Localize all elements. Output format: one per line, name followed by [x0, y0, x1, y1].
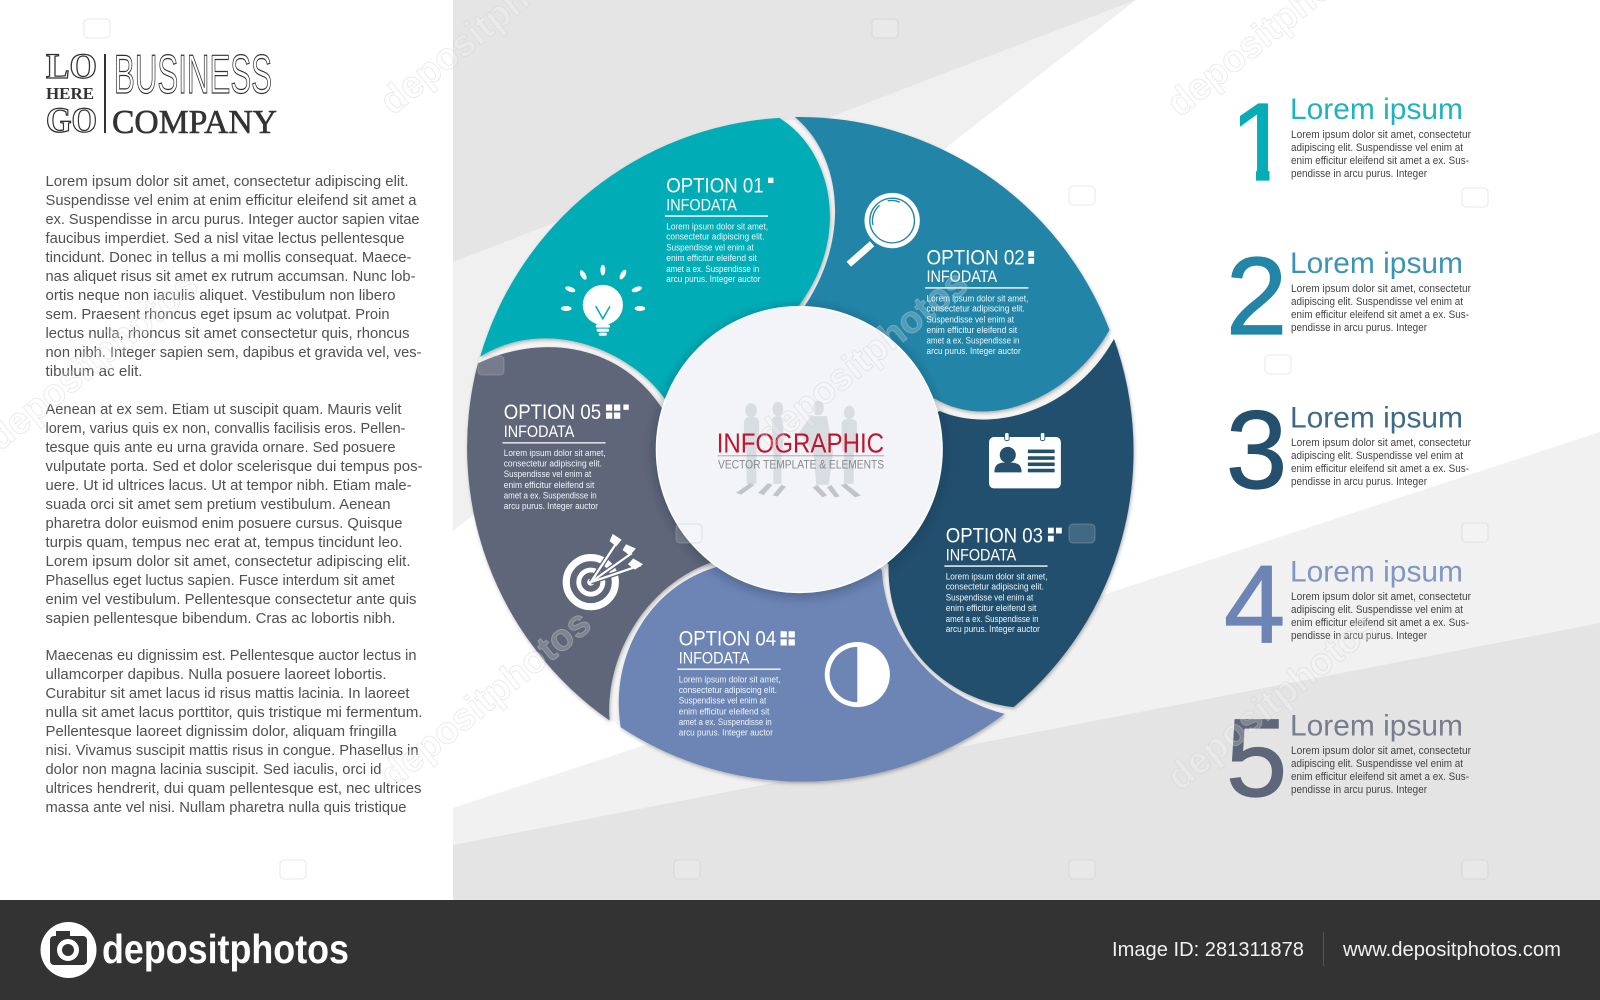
- body text: paragraph 3: ultrices hendrerit, dui quam pellentesque est, nec ultrices: [46, 780, 422, 797]
- body text: paragraph 1: tibulum ac elit.: [46, 363, 142, 380]
- option 04 text: amet a ex. Suspendisse in: [679, 717, 772, 727]
- option 03 text: Suspendisse vel enim at: [946, 592, 1034, 602]
- body text: paragraph 2: suada orci sit amet sem pretium vestibulum. Aenean: [46, 496, 390, 513]
- footer logo: [40, 922, 349, 978]
- body text: paragraph 2: enim vel vestibulum. Pellentesque consectetur ante quis: [46, 591, 416, 608]
- legend item 1: 1: [1230, 81, 1291, 204]
- body text: paragraph 2: lorem, varius quis ex non, convallis facilisis eros. Pellen-: [46, 420, 406, 437]
- legend item 2: Lorem ipsum dolor sit amet, consectetur: [1291, 283, 1471, 295]
- option 05 text: enim efficitur eleifend sit: [504, 480, 595, 490]
- legend item 5: Lorem ipsum: [1290, 710, 1463, 742]
- option 02 text: enim efficitur eleifend sit: [927, 325, 1018, 335]
- logo: business company: BUSINESS: [114, 43, 272, 105]
- legend item 2: Lorem ipsum: [1290, 247, 1463, 280]
- footer url: www.depositphotos.com: [1342, 939, 1561, 961]
- option 01 text: Lorem ipsum dolor sit amet,: [666, 221, 768, 231]
- legend item 4: enim efficitur eleifend sit amet a ex. Sus-: [1291, 617, 1469, 629]
- icon: target with arrows: [566, 534, 643, 607]
- option 04 text: [677, 627, 795, 737]
- body text: paragraph 2: sapien pellentesque bibendum. Cras ac lobortis nibh.: [46, 610, 396, 627]
- option 05 text: OPTION 05: [504, 400, 601, 424]
- segment 4: periwinkle: [619, 450, 1005, 782]
- body text: paragraph 1: nas aliquet risus sit amet ex rutrum accumsan. Nunc lob-: [46, 268, 416, 285]
- option 01 text: [665, 173, 773, 284]
- body text: paragraph 2: [46, 401, 423, 627]
- option 01 text: INFODATA: [666, 196, 737, 214]
- option 03 text: consectetur adipiscing elit.: [946, 582, 1044, 592]
- segment 3: navy: [799, 339, 1134, 707]
- silhouettes of people: [736, 401, 861, 497]
- body text: paragraph 2: uere. Ut id ultrices lacus. Ut at tempor nibh. Etiam male-: [46, 477, 412, 494]
- body text: paragraph 3: Maecenas eu dignissim est. Pellentesque auctor lectus in: [46, 647, 416, 664]
- option 02 text: [925, 245, 1034, 356]
- option 05 text: consectetur adipiscing elit.: [504, 459, 602, 469]
- option 03 text: enim efficitur eleifend sit: [946, 603, 1037, 613]
- legend item 5: adipiscing elit. Suspendisse vel enim at: [1291, 758, 1463, 770]
- body text: paragraph 1: Lorem ipsum dolor sit amet, consectetur adipiscing elit.: [46, 173, 408, 190]
- option 03 text: [944, 523, 1062, 634]
- legend item 2: enim efficitur eleifend sit amet a ex. Sus-: [1291, 309, 1469, 321]
- option 01 text: amet a ex. Suspendisse in: [666, 264, 759, 274]
- legend item 5: pendisse in arcu purus. Integer: [1291, 784, 1427, 796]
- option 05 text: arcu purus. Integer auctor: [504, 501, 598, 511]
- legend item 5: [1226, 697, 1471, 820]
- option 01 text: OPTION 01: [666, 173, 764, 197]
- legend item 4: adipiscing elit. Suspendisse vel enim at: [1291, 604, 1463, 616]
- option 05 text: Lorem ipsum dolor sit amet,: [504, 448, 606, 458]
- body text: paragraph 2: Lorem ipsum dolor sit amet, consectetur adipiscing elit.: [46, 553, 410, 570]
- legend item 3: enim efficitur eleifend sit amet a ex. Sus-: [1291, 463, 1469, 475]
- option 02 text: Lorem ipsum dolor sit amet,: [927, 293, 1028, 303]
- legend item 5: Lorem ipsum dolor sit amet, consectetur: [1291, 745, 1471, 757]
- body text: paragraph 3: massa ante vel nisi. Nullam pharetra nulla quis tristique: [46, 799, 406, 816]
- option 02 text: arcu purus. Integer auctor: [927, 346, 1021, 356]
- legend item 5: 5: [1226, 697, 1287, 820]
- legend item 1: [1240, 98, 1471, 181]
- option 02 text: INFODATA: [927, 268, 997, 286]
- center title: [717, 428, 884, 472]
- body text: paragraph 1: faucibus imperdiet. Sed a nisl vitae lectus pellentesque: [46, 230, 404, 247]
- body text: paragraph 3: Pellentesque laoreet dignissim dolor, aliquam fringilla: [46, 723, 397, 740]
- body text: paragraph 1: tincidunt. Donec in tellus a mi mollis consequat. Maece-: [46, 249, 412, 266]
- option 04 text: Lorem ipsum dolor sit amet,: [679, 675, 781, 685]
- watermark text: depositphotos: [372, 602, 599, 797]
- option 04 text: consectetur adipiscing elit.: [679, 685, 777, 695]
- watermark camera marks: [84, 19, 1488, 879]
- option 01 text: enim efficitur eleifend sit: [666, 253, 757, 263]
- option 05 text: INFODATA: [504, 423, 574, 441]
- option 03 text: Lorem ipsum dolor sit amet,: [946, 571, 1048, 581]
- logo: business company: COMPANY: [112, 104, 277, 141]
- footer image id: Image ID: 281311878: [1112, 939, 1304, 961]
- segment 2: blue: [795, 117, 1110, 450]
- body text: paragraph 3: nisi. Vivamus suscipit mattis risus in congue. Phasellus in: [46, 742, 418, 759]
- body text: paragraph 1: [46, 173, 422, 380]
- option 05 text: amet a ex. Suspendisse in: [504, 491, 597, 501]
- circular diagram: [467, 117, 1134, 782]
- body text: paragraph 3: nulla sit amet lacus porttitor, quis tristique mi fermentum.: [46, 704, 422, 721]
- legend item 3: Lorem ipsum: [1290, 402, 1463, 434]
- legend item 1: pendisse in arcu purus. Integer: [1291, 168, 1427, 180]
- option 05 text: Suspendisse vel enim at: [504, 469, 592, 479]
- legend item 2: 2: [1226, 235, 1287, 358]
- watermark text: depositphotos: [749, 262, 976, 457]
- legend item 1: adipiscing elit. Suspendisse vel enim at: [1291, 142, 1463, 154]
- option 04 text: OPTION 04: [679, 627, 776, 651]
- segment 5: slate: [467, 347, 799, 721]
- body text: paragraph 1: lectus nulla, rhoncus sit amet consectetur quis, rhoncus: [46, 325, 410, 342]
- option 04 text: enim efficitur eleifend sit: [679, 706, 770, 716]
- footer bar: [0, 900, 1600, 1000]
- watermark text: [0, 0, 1386, 799]
- option 03 text: OPTION 03: [946, 523, 1043, 547]
- center title: INFOGRAPHIC: [717, 428, 884, 459]
- legend item 1: Lorem ipsum dolor sit amet, consectetur: [1291, 129, 1471, 141]
- body text: paragraph 2: vulputate porta. Sed et dolor scelerisque dui tempus pos-: [46, 458, 423, 475]
- option 05 text: [502, 400, 629, 511]
- option 02 text: OPTION 02: [927, 245, 1025, 269]
- option 03 text: amet a ex. Suspendisse in: [946, 614, 1039, 624]
- logo: business company: HERE: [46, 84, 94, 103]
- option 02 text: Suspendisse vel enim at: [927, 314, 1014, 324]
- legend item 2: pendisse in arcu purus. Integer: [1291, 322, 1427, 334]
- logo: business company: [46, 43, 277, 141]
- legend item 2: adipiscing elit. Suspendisse vel enim at: [1291, 296, 1463, 308]
- legend item 4: 4: [1224, 543, 1285, 666]
- legend item 3: pendisse in arcu purus. Integer: [1291, 476, 1427, 488]
- option 01 text: arcu purus. Integer auctor: [666, 274, 760, 284]
- background: angular gray shapes: [453, 0, 1600, 900]
- option 03 text: INFODATA: [946, 546, 1016, 564]
- body text: paragraph 3: ullamcorper dapibus. Nulla posuere laoreet lobortis.: [46, 666, 386, 683]
- body text: paragraph 1: ex. Suspendisse in arcu purus. Integer auctor sapien vitae: [46, 211, 420, 228]
- legend item 4: Lorem ipsum: [1290, 556, 1463, 588]
- legend item 2: [1226, 235, 1471, 358]
- body text: paragraph 1: Suspendisse vel enim at enim efficitur eleifend sit amet a: [46, 192, 417, 209]
- body text: paragraph 3: [46, 647, 422, 816]
- option 02 text: amet a ex. Suspendisse in: [927, 336, 1019, 346]
- body text: paragraph 3: Curabitur sit amet lacus id risus mattis lacinia. In laoreet: [46, 685, 410, 702]
- center circle: [656, 307, 942, 592]
- legend item 1: enim efficitur eleifend sit amet a ex. Sus-: [1291, 155, 1469, 167]
- body text: paragraph 1: non nibh. Integer sapien sem, dapibus et gravida vel, ves-: [46, 344, 422, 361]
- body text: paragraph 2: tesque quis ante eu urna gravida ornare. Sed posuere: [46, 439, 396, 456]
- watermark text: depositphotos: [1159, 604, 1386, 799]
- legend item 3: adipiscing elit. Suspendisse vel enim at: [1291, 450, 1463, 462]
- icon: id card: [989, 433, 1061, 488]
- option 01 text: consectetur adipiscing elit.: [666, 232, 764, 242]
- body text: paragraph 2: pharetra dolor euismod enim posuere cursus. Quisque: [46, 515, 402, 532]
- footer logo: depositphotos: [102, 926, 349, 972]
- option 04 text: Suspendisse vel enim at: [679, 696, 767, 706]
- body text: paragraph 3: dolor non magna lacinia suscipit. Sed iaculis, orci id: [46, 761, 382, 778]
- legend item 3: [1226, 389, 1471, 512]
- legend item 1: Lorem ipsum: [1290, 93, 1463, 126]
- legend item 5: enim efficitur eleifend sit amet a ex. Sus-: [1291, 771, 1469, 783]
- option 04 text: arcu purus. Integer auctor: [679, 727, 773, 737]
- legend item 4: [1224, 543, 1471, 666]
- option 03 text: arcu purus. Integer auctor: [946, 624, 1040, 634]
- legend item 3: Lorem ipsum dolor sit amet, consectetur: [1291, 437, 1471, 449]
- legend item 4: pendisse in arcu purus. Integer: [1291, 630, 1427, 642]
- option 01 text: Suspendisse vel enim at: [666, 242, 754, 252]
- icon: light bulb: [561, 265, 645, 336]
- body text: paragraph 2: Phasellus eget luctus sapien. Fusce interdum sit amet: [46, 572, 395, 589]
- option 04 text: INFODATA: [679, 649, 749, 667]
- legend item 4: Lorem ipsum dolor sit amet, consectetur: [1291, 591, 1471, 603]
- legend item 3: 3: [1226, 389, 1287, 512]
- option 02 text: consectetur adipiscing elit.: [927, 304, 1025, 314]
- body text: paragraph 2: Aenean at ex sem. Etiam ut suscipit quam. Mauris velit: [46, 401, 402, 418]
- logo: business company: GO: [46, 100, 97, 140]
- logo: business company: LO: [46, 46, 97, 86]
- icon: magnifying glass: [849, 193, 920, 264]
- body text: paragraph 1: ortis neque non iaculis aliquet. Vestibulum non libero: [46, 287, 396, 304]
- center title: VECTOR TEMPLATE & ELEMENTS: [718, 458, 884, 472]
- body text: paragraph 2: turpis quam, tempus nec erat at, tempus tincidunt leo.: [46, 534, 403, 551]
- segment 1: teal: [480, 118, 830, 450]
- icon: half circle: [825, 642, 890, 707]
- body text: paragraph 1: sem. Praesent rhoncus eget ipsum ac volutpat. Proin: [46, 306, 390, 323]
